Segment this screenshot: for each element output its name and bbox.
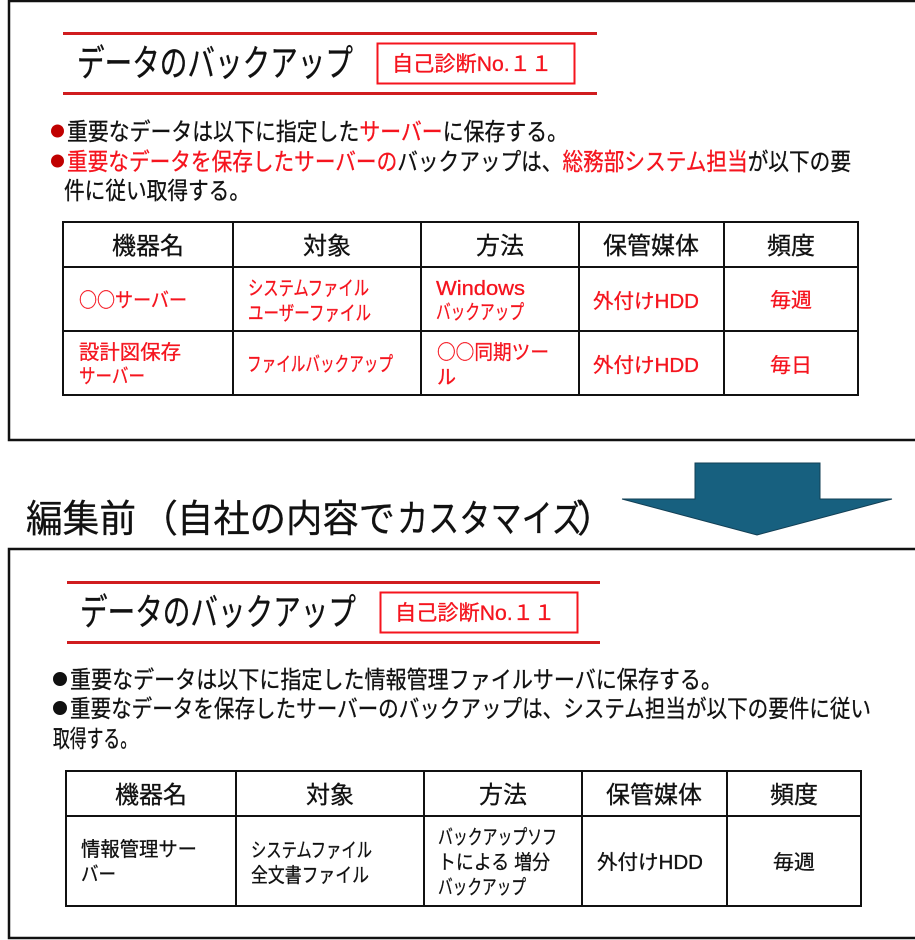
table: top panel backup requirements: 方法: [476, 233, 524, 260]
table: bottom panel backup requirements: バックアップ: [438, 876, 526, 899]
text block: bottom panel bullets: [53, 667, 871, 753]
badge: self diagnosis number: [380, 592, 578, 632]
text block: bottom panel bullets: 取得する。: [53, 726, 137, 753]
table: bottom panel backup requirements: バックアップソフ: [438, 826, 557, 849]
table: bottom panel backup requirements: 頻度: [770, 782, 818, 809]
heading: before editing: 自社の内容で: [177, 499, 395, 541]
table: top panel backup requirements: 毎週: [770, 289, 812, 312]
heading: before editing: （: [140, 499, 178, 541]
badge: self diagnosis number: 自己診断No.１１: [392, 53, 552, 76]
table: top panel backup requirements: ○○サーバー: [79, 284, 187, 313]
table: top panel backup requirements: バックアップ: [436, 301, 524, 324]
heading: before editing: ）: [577, 499, 615, 541]
table: top panel backup requirements: システムファイル: [248, 278, 369, 300]
table: top panel backup requirements: 機器名: [112, 233, 184, 260]
heading: before editing: 編集前: [26, 499, 136, 541]
text block: top panel bullets: [51, 119, 851, 205]
table: top panel backup requirements: 外付けHDD: [593, 290, 699, 313]
heading: bottom panel title: データのバックアップ: [80, 592, 356, 633]
table: bottom panel backup requirements: バー: [81, 864, 116, 886]
table: bottom panel backup requirements: 毎週: [773, 851, 815, 874]
table: top panel backup requirements: ユーザーファイル: [248, 303, 371, 325]
table: bottom panel backup requirements: 全文書ファイル: [251, 864, 369, 887]
text block: bottom panel bullets: 重要なデータは以下に指定した情報管理ファイルサーバに保存する。: [70, 667, 722, 694]
heading: before editing: [9, 488, 615, 544]
table: bottom panel backup requirements: トによる 増分: [438, 851, 550, 874]
table: top panel backup requirements: Windows: [436, 278, 525, 300]
table: top panel backup requirements: ○○同期ツー: [437, 336, 549, 365]
table: top panel backup requirements: 設計図保存: [79, 341, 181, 364]
heading: before editing: カスタマイズ: [397, 499, 583, 541]
badge: self diagnosis number: 自己診断No.１１: [395, 602, 555, 625]
panel: after example: [9, 1, 915, 440]
table: bottom panel backup requirements: 方法: [479, 782, 527, 809]
table: bottom panel backup requirements: 情報管理サー: [81, 838, 197, 861]
table: top panel backup requirements: 対象: [303, 233, 351, 260]
table: top panel backup requirements: 毎日: [770, 354, 812, 377]
text block: top panel bullets: 重要なデータを保存したサーバーのバックアップは、総務部システム担当が以下の要: [67, 149, 851, 176]
heading: top panel title: [63, 32, 597, 95]
heading: top panel title: データのバックアップ: [77, 43, 353, 84]
text block: top panel bullets: 件に従い取得する。: [64, 178, 250, 205]
table: top panel backup requirements: 保管媒体: [603, 233, 699, 260]
table: top panel backup requirements: 頻度: [767, 233, 815, 260]
heading: bottom panel title: [67, 581, 600, 644]
table: top panel backup requirements: ファイルバックアップ: [247, 353, 393, 376]
table: bottom panel backup requirements: 保管媒体: [606, 782, 702, 809]
table: bottom panel backup requirements: システムファイル: [251, 840, 372, 862]
table: bottom panel backup requirements: 機器名: [115, 782, 187, 809]
table: top panel backup requirements: ル: [437, 367, 456, 389]
table: top panel backup requirements: 外付けHDD: [593, 354, 699, 377]
table: bottom panel backup requirements: 外付けHDD: [597, 851, 703, 874]
arrow: down: [622, 463, 892, 535]
text block: top panel bullets: 重要なデータは以下に指定したサーバーに保存する。: [67, 119, 568, 146]
table: top panel backup requirements: [63, 222, 858, 395]
table: bottom panel backup requirements: [66, 771, 861, 906]
badge: self diagnosis number: [378, 44, 574, 84]
table: top panel backup requirements: サーバー: [79, 366, 145, 388]
panel: before example: [9, 549, 915, 938]
table: bottom panel backup requirements: 対象: [306, 782, 354, 809]
